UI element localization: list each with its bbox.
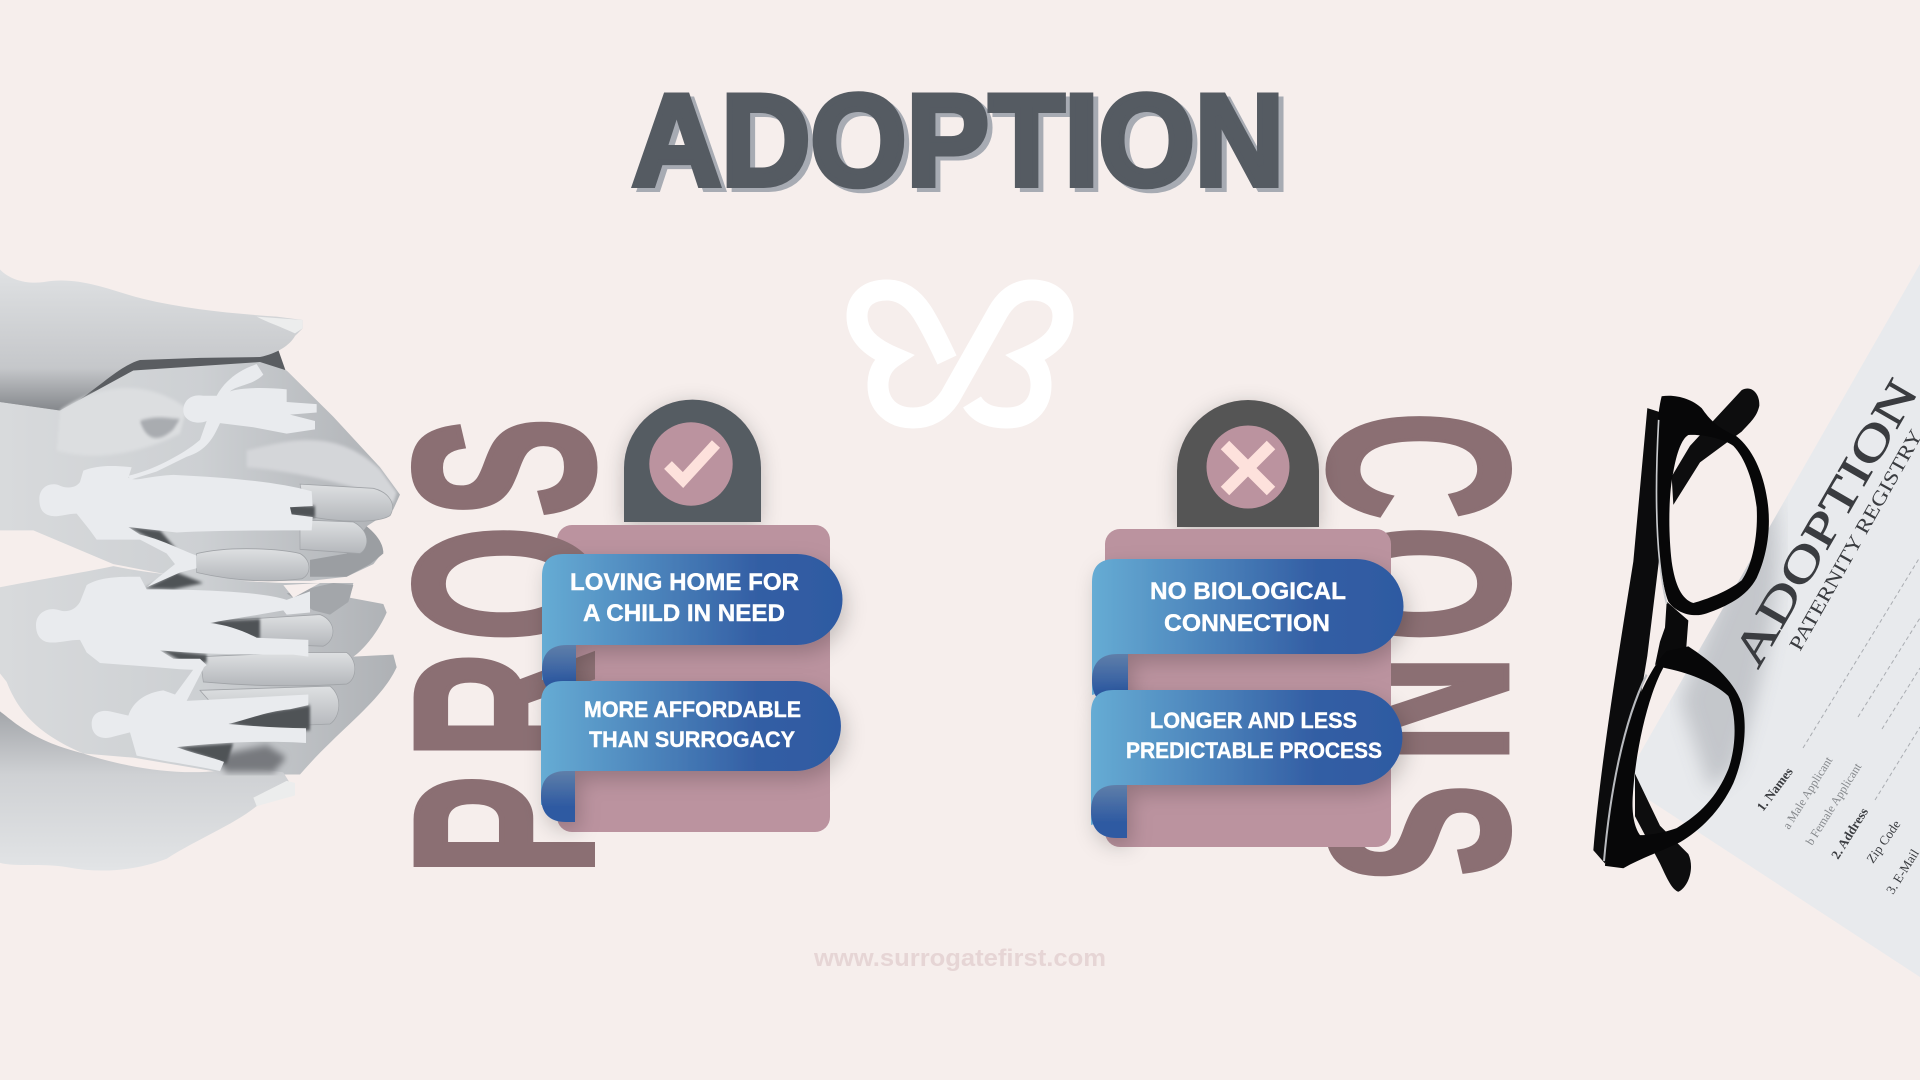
- arch tab: [624, 400, 761, 522]
- top lens frame: [1656, 396, 1769, 615]
- card body: [557, 525, 830, 832]
- website url: www.surrogatefirst.com: [813, 945, 1106, 972]
- temple tip top: [1672, 388, 1759, 505]
- heading: PROS vertical: PROS: [363, 418, 647, 875]
- lower palm and fingers: [0, 566, 397, 775]
- document heading: ADOPTION: [1722, 371, 1920, 675]
- photo: adoption document: [1623, 264, 1920, 977]
- pros item two text: MORE AFFORDABLE: [584, 697, 801, 722]
- photo: black glasses: [1593, 388, 1769, 892]
- bottom lens frame: [1605, 646, 1745, 868]
- title: ADOPTION: [632, 67, 1284, 213]
- cons item two text: PREDICTABLE PROCESS: [1126, 738, 1382, 763]
- temple tip bottom: [1635, 774, 1691, 892]
- frame highlight lower: [1604, 675, 1647, 861]
- ribbon: cons item one: [1092, 559, 1404, 706]
- paper silhouette: adult two: [36, 577, 310, 670]
- ribbon: pros item two: [541, 681, 841, 822]
- top hand: [0, 269, 303, 417]
- document dashed lines: [1803, 557, 1920, 800]
- pros item one text: A CHILD IN NEED: [583, 600, 785, 627]
- panel: pros card: [557, 400, 830, 832]
- paper silhouette: child two: [92, 667, 308, 771]
- ribbon: pros item one: [542, 554, 842, 696]
- document subheading: PATERNITY REGISTRY: [1785, 426, 1920, 654]
- ribbon: cons item two: [1091, 690, 1402, 838]
- paper sheet: [1623, 264, 1920, 977]
- document form rows: 2. Address: [1828, 805, 1871, 862]
- cons item two text: LONGER AND LESS: [1150, 708, 1357, 733]
- ribbon fold: [1091, 785, 1127, 838]
- frame highlight: [1657, 420, 1667, 604]
- pros item one text: LOVING HOME FOR: [570, 569, 799, 596]
- icon: cross mark: [1206, 426, 1290, 508]
- heading: CONS vertical: CONS: [1276, 412, 1560, 880]
- paper silhouette: adult one: [39, 466, 313, 587]
- cons item two text: [1126, 708, 1382, 763]
- ribbon fold: [541, 771, 575, 822]
- shadows under paper cutouts: [127, 504, 315, 764]
- document form rows: b Female Applicant: [1803, 760, 1865, 848]
- folded temple arms: [1593, 408, 1662, 863]
- pros item one text: [570, 569, 799, 627]
- ribbon fold: [1092, 654, 1128, 706]
- document form rows: Zip Code: [1863, 817, 1904, 866]
- document form rows: a Male Applicant: [1780, 754, 1836, 832]
- bridge: [1655, 602, 1688, 665]
- cons item one text: [1150, 578, 1346, 637]
- bottom hand: [0, 711, 295, 871]
- document form rows: 1. Names: [1753, 764, 1796, 814]
- pros item two text: THAN SURROGACY: [589, 727, 795, 752]
- cons item one text: NO BIOLOGICAL: [1150, 578, 1346, 605]
- cons item one text: CONNECTION: [1164, 610, 1330, 637]
- arch tab: [1177, 400, 1319, 527]
- paper silhouette: child one: [128, 364, 317, 480]
- ribbon fold: [542, 645, 576, 696]
- icon: white butterfly logo: [857, 290, 1063, 418]
- pros item two text: [584, 697, 801, 752]
- upper palm and fingers: [0, 362, 400, 581]
- photo: hands holding paper family: [0, 269, 400, 871]
- document form rows: [1753, 754, 1920, 897]
- panel: cons card: [1105, 400, 1391, 847]
- icon: check mark: [649, 422, 733, 506]
- glasses shadow on paper: [1680, 490, 1778, 790]
- card body: [1105, 529, 1391, 847]
